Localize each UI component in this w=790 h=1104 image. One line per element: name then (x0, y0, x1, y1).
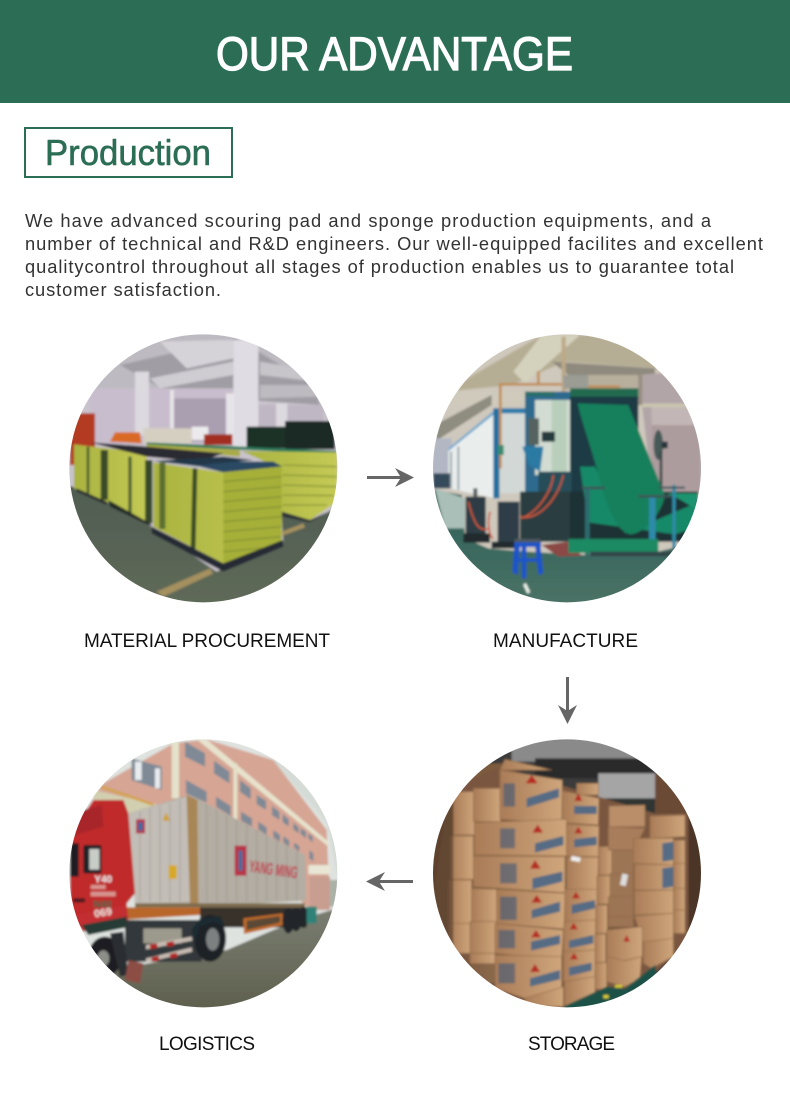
intro paragraph: customer satisfaction. (25, 279, 221, 300)
rails (647, 484, 678, 550)
tanks (466, 497, 486, 535)
carton markings (526, 775, 630, 972)
photo: logistics: N40 (93, 899, 112, 910)
intro paragraph: qualitycontrol throughout all stages of production enables us to guarantee total (25, 256, 734, 277)
floor (434, 488, 676, 602)
photo: storage (433, 739, 701, 1008)
truck cab (70, 800, 135, 932)
truck lower parts (125, 920, 202, 962)
carton backing (460, 770, 690, 1008)
green sheet (580, 467, 698, 534)
intro paragraph (25, 210, 763, 300)
fan (654, 430, 663, 460)
photo: logistics: YANG MING (248, 857, 299, 882)
cartons (448, 759, 685, 1007)
building (93, 739, 330, 907)
label: logistics: LOGISTICS (159, 1034, 255, 1055)
copper pipes (500, 371, 620, 468)
title: OUR ADVANTAGE (216, 27, 573, 80)
arrow: right (367, 468, 414, 487)
dark base of machine (570, 492, 698, 542)
yellow pallets front (74, 444, 150, 525)
long oven wall left (433, 437, 452, 486)
photo: logistics: Y40 (94, 874, 113, 885)
section heading: Production (25, 128, 232, 177)
floor (70, 484, 331, 602)
photo: material procurement (69, 334, 338, 602)
photo: logistics: 069 (93, 906, 113, 920)
ground (112, 908, 332, 1008)
ceiling and beams (97, 334, 288, 388)
machine (524, 390, 572, 494)
columns (135, 372, 149, 435)
back wall (162, 388, 234, 400)
arrow: left (366, 872, 413, 891)
photo: logistics (69, 739, 338, 1008)
header banner (0, 0, 790, 103)
intro paragraph: number of technical and R&D engineers. Our well-equipped facilites and excellent (25, 233, 763, 254)
ceiling (458, 335, 656, 391)
shadowed stack edge (433, 804, 454, 946)
label: storage: STORAGE (528, 1034, 615, 1055)
label: manufacture: MANUFACTURE (493, 631, 638, 652)
warehouse ceiling and back (512, 738, 658, 762)
container (156, 795, 306, 905)
section heading: Production: Production (45, 132, 211, 173)
chassis (127, 907, 200, 919)
intro paragraph: We have advanced scouring pad and sponge production equipments, and a (25, 210, 712, 231)
right wall (642, 372, 701, 488)
goods at the back (70, 413, 95, 465)
green floor (562, 964, 658, 1008)
blue stool (512, 542, 543, 578)
label: material procurement: MATERIAL PROCUREMENT (84, 631, 330, 652)
photo: manufacture (433, 334, 701, 602)
container logos (136, 819, 145, 833)
green stacks right (147, 442, 337, 454)
arrow: down (558, 677, 577, 724)
